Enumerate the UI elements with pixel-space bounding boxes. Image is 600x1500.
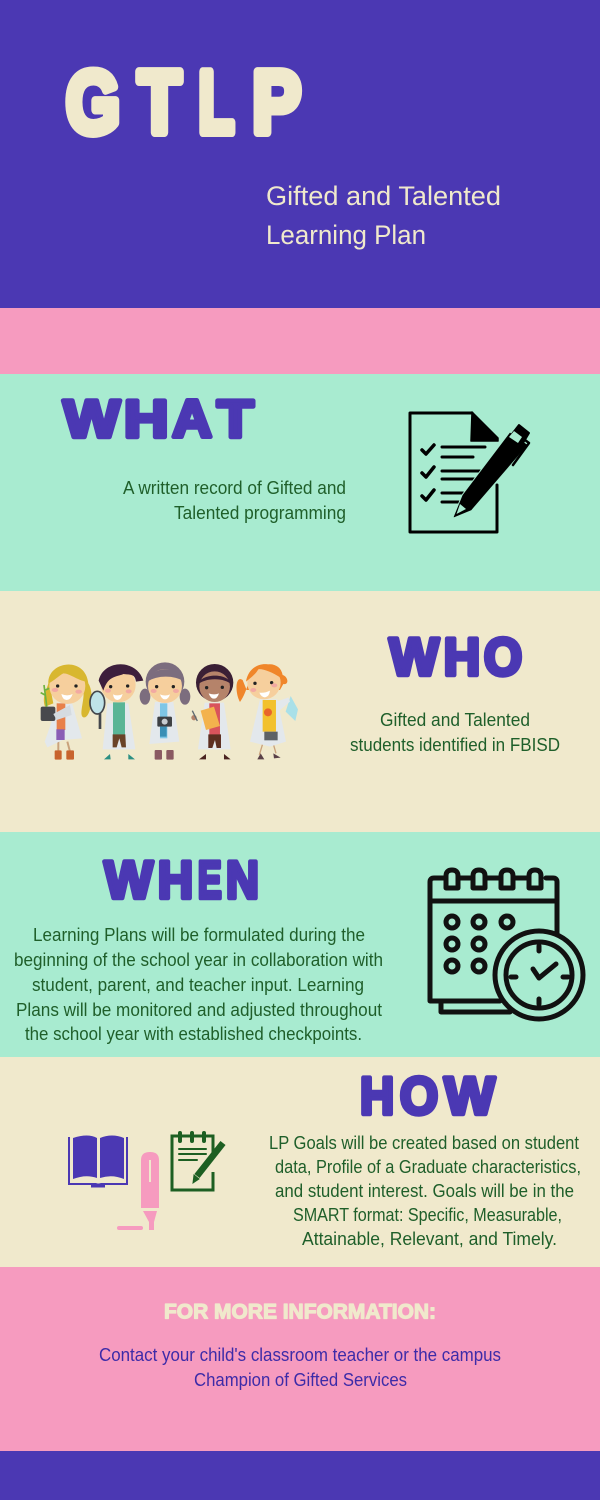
heading: when: E — [198, 851, 222, 910]
heading: what: T — [217, 390, 254, 449]
subtitle — [266, 181, 501, 250]
heading: who — [389, 628, 522, 687]
text: contact details: Champion of Gifted Services — [194, 1370, 407, 1390]
subtitle: Learning Plan — [266, 220, 426, 250]
heading: how: H — [360, 1067, 394, 1126]
text: when description: student, parent, and teacher input. Learning — [32, 975, 364, 995]
text: when description — [14, 925, 383, 1044]
title: G — [66, 52, 120, 152]
heading: when: H — [158, 851, 193, 910]
heading: who: W — [389, 628, 439, 687]
subtitle: Gifted and Talented — [266, 181, 501, 211]
title: L — [198, 52, 234, 152]
panel: what — [0, 374, 600, 591]
child 1 — [41, 664, 92, 760]
heading: when — [104, 851, 259, 910]
text: contact details: Contact your child's classroom teacher or the campus — [99, 1345, 501, 1365]
text: when description: the school year with established checkpoints. — [25, 1024, 362, 1044]
panel: who — [0, 591, 600, 832]
text: who description: Gifted and Talented — [380, 710, 530, 730]
text: what description: Talented programming — [174, 503, 346, 523]
title: P — [252, 52, 301, 152]
heading: how — [360, 1067, 495, 1126]
title: T — [138, 52, 181, 152]
icon: pink pen — [117, 1152, 159, 1230]
text: when description: Plans will be monitored and adjusted throughout — [16, 1000, 382, 1020]
panel: more information — [0, 1267, 600, 1451]
heading: who: H — [444, 628, 480, 687]
heading: what: H — [124, 390, 169, 449]
text: how description: SMART format: Specific, Measurable, — [293, 1205, 562, 1225]
heading: when: N — [226, 851, 259, 910]
child 3 — [140, 662, 190, 760]
text: what description: A written record of Gifted and — [123, 478, 346, 498]
text: when description: beginning of the school year in collaboration with — [14, 950, 383, 970]
heading: who: O — [484, 628, 522, 687]
icon: notepad with pencil — [172, 1133, 223, 1190]
text: when description: Learning Plans will be formulated during the — [33, 925, 365, 945]
title — [66, 52, 301, 152]
text: who description: students identified in FBISD — [350, 735, 560, 755]
heading: how: W — [444, 1067, 495, 1126]
text: who description — [350, 710, 560, 755]
text: contact details — [99, 1345, 501, 1390]
heading: when: W — [104, 851, 153, 910]
panel: title banner — [0, 0, 600, 308]
panel: when — [0, 832, 600, 1057]
heading: what — [63, 390, 254, 449]
text: how description: Attainable, Relevant, and Timely. — [302, 1229, 557, 1249]
heading: what: W — [63, 390, 120, 449]
heading: what: A — [172, 390, 212, 449]
icon: checklist document with pen — [410, 412, 529, 532]
child 2 — [90, 664, 143, 759]
text: what description — [123, 478, 346, 523]
text: how description: and student interest. Goals will be in the — [275, 1181, 574, 1201]
text: how description: LP Goals will be created based on student — [269, 1133, 579, 1153]
text: how description — [269, 1133, 581, 1249]
child 5 — [237, 664, 298, 759]
heading: for more information: FOR MORE INFORMATION: — [164, 1300, 436, 1324]
child 4 — [191, 664, 233, 759]
pink divider band — [0, 308, 600, 374]
icon: calendar with clock — [430, 870, 583, 1019]
icon: open book — [68, 1136, 128, 1188]
panel: how — [0, 1057, 600, 1267]
illustration: five children in lab coats — [41, 662, 298, 760]
heading: how: O — [400, 1067, 438, 1126]
footer band — [0, 1451, 600, 1500]
